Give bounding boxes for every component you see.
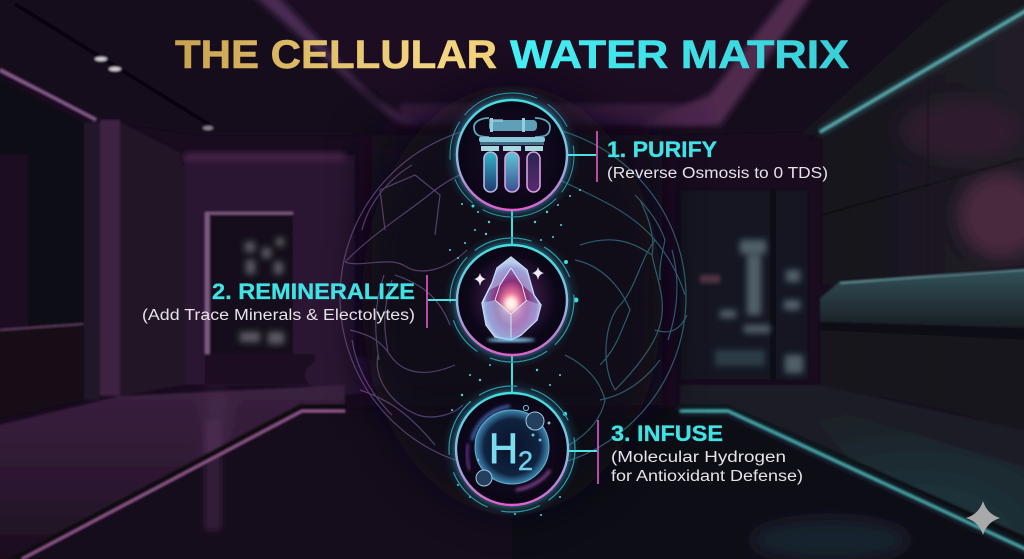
right window: night city [680,190,808,380]
label: infuse: 3. INFUSE [611,421,723,446]
icon: reverse osmosis filter [474,118,550,192]
centre back wall shadow [362,85,662,515]
label: infuse: (Molecular Hydrogen [611,449,786,466]
right wall [808,8,1024,285]
right wall lit counter band [820,269,1024,328]
ceiling [0,0,1024,135]
circle: remineralize ring [444,232,580,368]
connector: purify to remineralize [511,210,513,245]
label: purify [607,137,828,182]
label: infuse: for Antioxidant Defense) [611,468,803,485]
circle: infuse ring [443,380,581,518]
left window [205,212,293,354]
title: THE CELLULAR [175,33,497,77]
label: purify: (Reverse Osmosis to 0 TDS) [607,165,828,182]
circle: purify ring [444,87,580,223]
right floor [680,385,1024,545]
title [175,33,849,77]
ceiling track lights [15,4,210,125]
right lower cabinets [820,330,1024,432]
icon: corner sparkle [966,501,1000,535]
left room: glass wall [0,75,85,420]
connector: infuse label line [569,420,598,484]
background sphere network [340,124,687,470]
icon: hydrogen bubble: 2 [518,446,533,476]
icon: hydrogen bubble: H [489,425,518,473]
flow connectors [511,210,513,393]
label: remineralize: (Add Trace Minerals & Electolytes) [142,307,415,324]
central pool [0,410,1024,559]
particles around circles [449,189,581,516]
label: purify: 1. PURIFY [607,137,717,162]
left wall [120,122,185,396]
sofa shapes [205,354,315,384]
connector: purify label line [567,131,597,182]
left column [84,122,100,400]
connector: remineralize label line [427,275,456,328]
sphere: left magenta half [340,124,513,470]
icon: mineral crystal [468,254,556,342]
ceiling recess [248,0,815,125]
sphere: right teal half [513,124,687,470]
step 3: infuse [443,380,803,518]
label: remineralize [142,279,415,324]
label: infuse [611,421,803,485]
pool edge lights [8,404,345,559]
step 1: purify [444,87,828,223]
connector: remineralize to infuse [511,356,513,393]
label: remineralize: 2. REMINERALIZE [212,279,415,304]
right wall teal light strip [820,6,1024,132]
back wall [185,155,355,385]
step 2: remineralize [142,232,580,368]
left floor [0,385,345,559]
title: WATER MATRIX [510,33,849,77]
icon: hydrogen bubble [467,405,550,490]
